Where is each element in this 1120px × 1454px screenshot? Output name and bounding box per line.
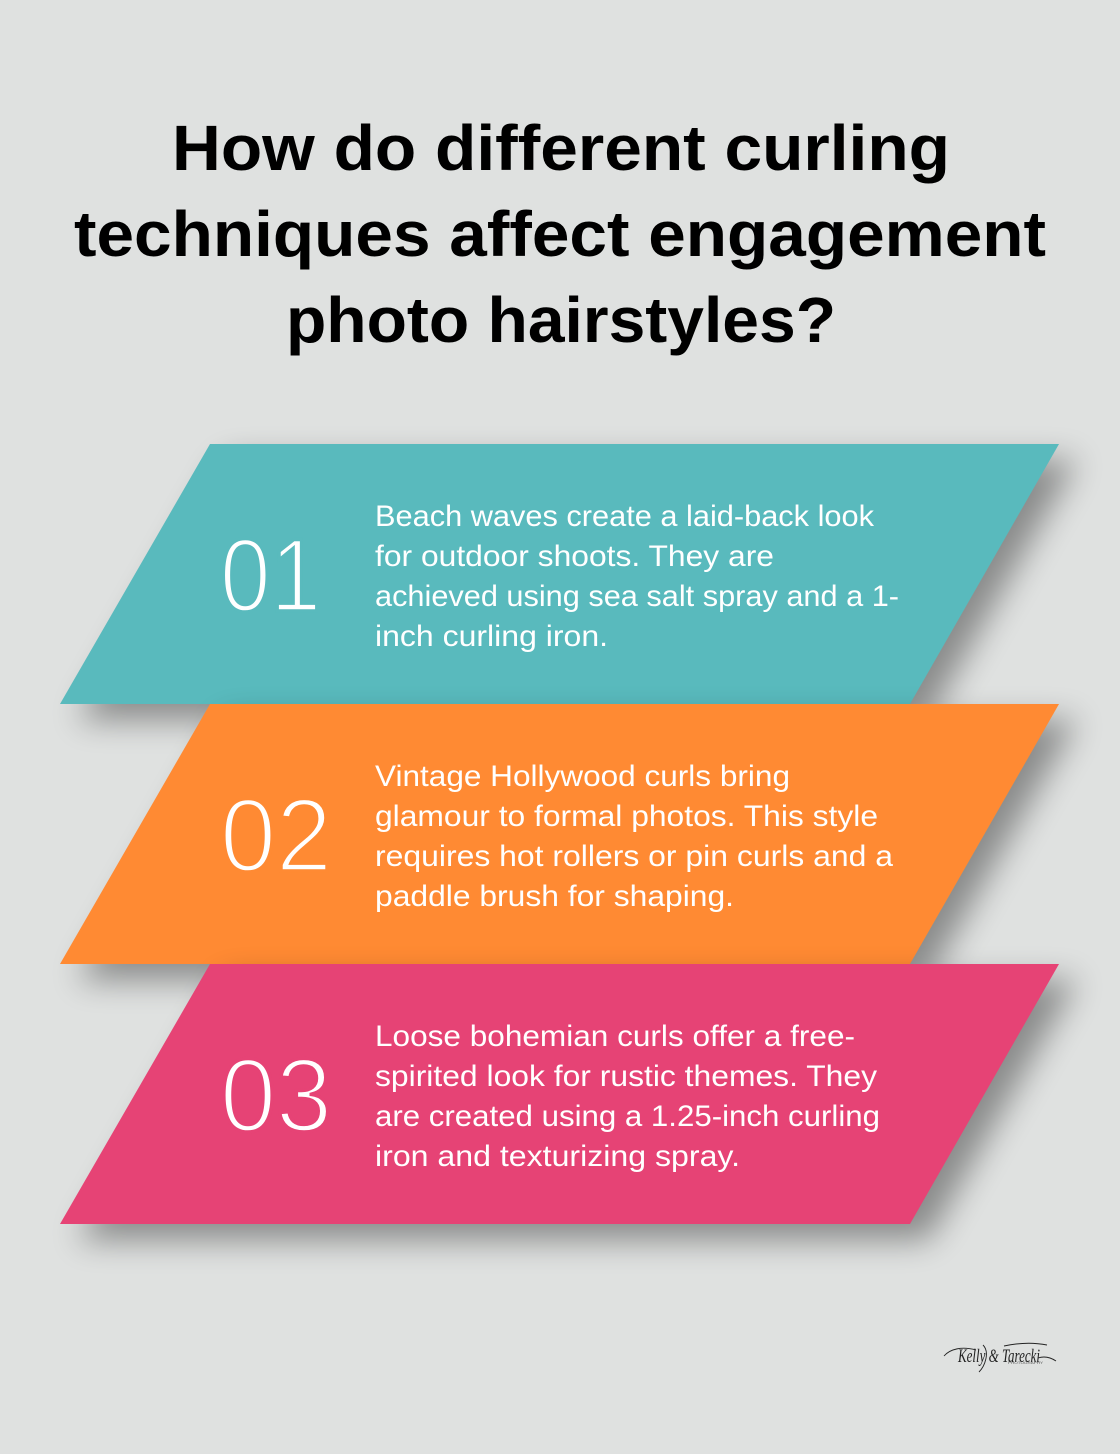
- logo: Kelly & Tarecki Photography: [944, 1343, 1056, 1372]
- description 02: paddle brush for shaping.: [375, 880, 734, 913]
- title: How do different curling: [172, 112, 950, 184]
- description 03: iron and texturizing spray.: [375, 1140, 740, 1173]
- panel: step 03 loose bohemian curls: [60, 964, 1077, 1240]
- description 03: Loose bohemian curls offer a free-: [375, 1020, 855, 1053]
- description 03: spirited look for rustic themes. They: [375, 1060, 877, 1093]
- logo: Kelly & Tarecki Photography: PHOTOGRAPHY: [1008, 1361, 1044, 1365]
- description 01: inch curling iron.: [375, 620, 608, 653]
- description 01: for outdoor shoots. They are: [375, 540, 774, 573]
- description 01: Beach waves create a laid-back look: [375, 500, 875, 533]
- description 01: [375, 500, 899, 653]
- panel: step 02 vintage hollywood curls: [60, 704, 1077, 980]
- title: [74, 112, 1046, 356]
- logo: Kelly & Tarecki Photography: Kelly & Tarecki: [957, 1346, 1040, 1367]
- description 02: glamour to formal photos. This style: [375, 800, 878, 833]
- title: techniques affect engagement: [74, 198, 1046, 270]
- description 01: achieved using sea salt spray and a 1-: [375, 580, 899, 613]
- description 02: [375, 760, 893, 913]
- panel: step 01 beach waves: [60, 444, 1077, 720]
- description 03: [375, 1020, 880, 1173]
- number 01: 01: [220, 518, 321, 634]
- description 02: Vintage Hollywood curls bring: [375, 760, 790, 793]
- number 02: 02: [220, 778, 332, 894]
- title: photo hairstyles?: [286, 284, 836, 356]
- number 03: 03: [220, 1038, 332, 1154]
- description 03: are created using a 1.25-inch curling: [375, 1100, 880, 1133]
- description 02: requires hot rollers or pin curls and a: [375, 840, 893, 873]
